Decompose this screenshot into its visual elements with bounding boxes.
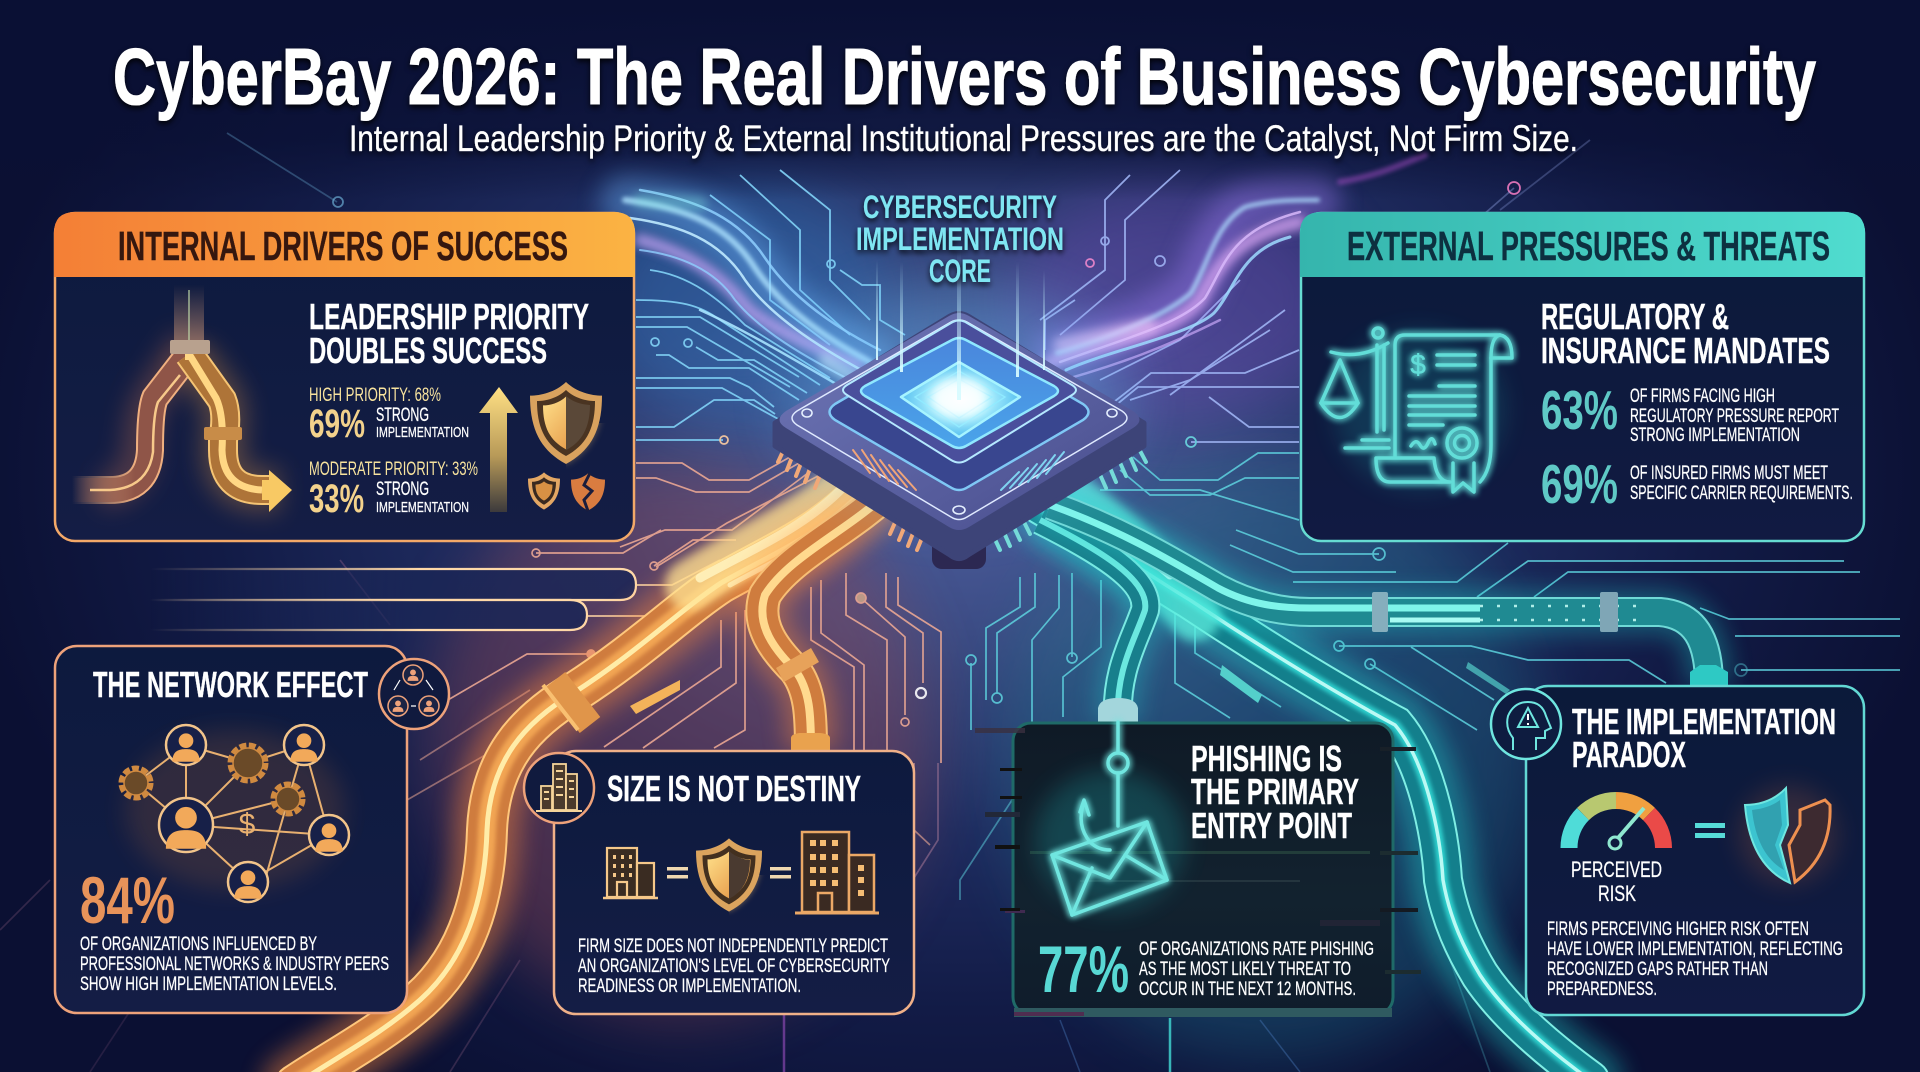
chip screen <box>861 338 1058 448</box>
heading: PHISHING IS <box>1191 738 1342 779</box>
panel header <box>54 212 635 277</box>
stat: high priority: IMPLEMENTATION <box>376 424 469 441</box>
heading: DOUBLES SUCCESS <box>309 330 547 371</box>
heading: THE PRIMARY <box>1191 771 1359 812</box>
panel: internal drivers of success <box>54 212 635 541</box>
stat: moderate priority <box>309 458 478 521</box>
gauge label: PERCEIVED <box>1571 857 1662 882</box>
description <box>578 936 890 997</box>
heading <box>309 296 589 371</box>
header text: INTERNAL DRIVERS OF SUCCESS <box>118 223 568 269</box>
lower verticals <box>784 1015 1300 1072</box>
description: OF ORGANIZATIONS RATE PHISHING <box>1139 939 1374 960</box>
stat: 63%: 63% <box>1541 379 1618 441</box>
core label: CORE <box>929 253 991 289</box>
chip top plate <box>780 313 1140 530</box>
equals sign <box>1695 823 1725 838</box>
description <box>1139 939 1374 1000</box>
description: AN ORGANIZATION'S LEVEL OF CYBERSECURITY <box>578 956 890 977</box>
heading: THE NETWORK EFFECT <box>93 664 368 705</box>
icon: risk gauge <box>1569 800 1664 849</box>
panel: external pressures and threats <box>1300 212 1865 541</box>
cyan dashes <box>1220 662 1510 703</box>
circuit traces: upper right <box>1040 140 1590 447</box>
description: AS THE MOST LIKELY THREAT TO <box>1139 959 1351 980</box>
icon: small building <box>603 848 658 898</box>
description: RECOGNIZED GAPS RATHER THAN <box>1547 959 1768 980</box>
chip base side <box>775 314 1144 558</box>
chip corner rings <box>802 409 1117 514</box>
heading: LEADERSHIP PRIORITY <box>309 296 589 337</box>
circuit traces: lower right teal <box>960 453 1900 1072</box>
panel body <box>55 646 407 1013</box>
stat: 84%: 84% <box>80 863 175 937</box>
gauge label <box>1571 857 1662 906</box>
chip <box>775 250 1146 569</box>
description: FIRM SIZE DOES NOT INDEPENDENTLY PREDICT <box>578 936 888 957</box>
heading: SIZE IS NOT DESTINY <box>607 768 861 809</box>
chip core glare <box>931 378 987 418</box>
chip core lines <box>915 371 1005 427</box>
chip stub <box>932 535 986 569</box>
panel body <box>1013 723 1393 1015</box>
chip edge highlight <box>792 320 1127 520</box>
heading <box>1572 701 1836 775</box>
heading: ENTRY POINT <box>1191 805 1352 846</box>
description: SHOW HIGH IMPLEMENTATION LEVELS. <box>80 974 337 995</box>
stat: high priority <box>309 384 469 446</box>
description: PREPAREDNESS. <box>1547 979 1657 1000</box>
stat: 69%: 69% <box>1541 453 1618 515</box>
icon: scales and insurance document <box>1321 328 1512 492</box>
stat: moderate priority: 33% <box>309 477 364 521</box>
icon: large building <box>795 832 879 913</box>
glitch streaks <box>975 728 1421 1017</box>
description: PROFESSIONAL NETWORKS & INDUSTRY PEERS <box>80 954 389 975</box>
chip inner fans <box>853 450 1064 490</box>
chip recess lip <box>830 334 1088 490</box>
circuit traces: upper left <box>227 133 905 444</box>
panel body <box>55 213 634 541</box>
icon glow <box>1335 330 1505 490</box>
icon: broken shield <box>571 473 605 511</box>
heading <box>1191 738 1359 846</box>
chip pins <box>778 447 1146 550</box>
chip recess ring <box>843 320 1076 462</box>
panel: phishing <box>975 722 1421 1017</box>
network diagram: $ <box>239 808 256 841</box>
panel: the network effect <box>55 646 449 1013</box>
icon badge: buildings <box>524 753 594 823</box>
icon badge: head with warning <box>1491 689 1561 759</box>
icon: hook and envelope <box>1052 722 1167 915</box>
chip glow <box>789 290 1129 510</box>
light swooshes: upper right <box>1045 155 1425 385</box>
panel body <box>1301 213 1864 541</box>
icon: large shield <box>530 382 602 464</box>
icon glow <box>1035 770 1185 910</box>
icon: cracked shield <box>1738 785 1838 885</box>
heading: PARADOX <box>1572 734 1686 775</box>
description: OF ORGANIZATIONS INFLUENCED BY <box>80 934 317 955</box>
network diagram <box>121 725 349 902</box>
circuit traces: lower left orange <box>0 457 941 1072</box>
subtitle: Internal Leadership Priority & External Institutional Pressures are the Catalyst, Not Firm Size. <box>349 118 1578 159</box>
panel header <box>1300 212 1865 277</box>
pipe: cyan branch to paradox <box>1050 505 1728 685</box>
stat: moderate priority: MODERATE PRIORITY: 33% <box>309 458 478 480</box>
stat: moderate priority: STRONG <box>376 479 429 500</box>
light swooshes: upper left <box>625 190 880 395</box>
stat: moderate priority: IMPLEMENTATION <box>376 499 469 516</box>
icon: small shield <box>528 472 560 510</box>
stat: high priority: STRONG <box>376 405 429 426</box>
description <box>1547 919 1843 1000</box>
core label: IMPLEMENTATION <box>856 221 1064 257</box>
panel: size is not destiny <box>524 751 914 1014</box>
gauge label: RISK <box>1598 881 1636 906</box>
panel: implementation paradox <box>1491 686 1864 1015</box>
icon: splitting pipe <box>72 285 292 512</box>
orange dashes <box>630 680 680 714</box>
stat: 77%: 77% <box>1038 932 1129 1006</box>
icon: up arrow <box>479 387 518 512</box>
stat: high priority: 69% <box>309 402 365 446</box>
stat: 63% <box>1541 379 1839 446</box>
stat: 63%: STRONG IMPLEMENTATION <box>1630 425 1800 446</box>
pipe: orange branch to size panel <box>762 490 890 750</box>
stat: high priority: HIGH PRIORITY: 68% <box>309 384 441 406</box>
equals sign <box>667 867 688 878</box>
core label <box>856 189 1064 289</box>
icon badge: peers <box>379 659 449 729</box>
description: FIRMS PERCEIVING HIGHER RISK OFTEN <box>1547 919 1809 940</box>
description <box>80 934 389 995</box>
stat: 63%: OF FIRMS FACING HIGH <box>1630 386 1775 407</box>
heading: REGULATORY & <box>1541 296 1729 337</box>
icon: shield <box>696 838 762 912</box>
description: READINESS OR IMPLEMENTATION. <box>578 976 801 997</box>
stat: 69% <box>1541 453 1853 515</box>
panel body <box>554 751 914 1014</box>
icon: scales and insurance document: $ <box>1410 349 1426 380</box>
chip light beams <box>876 250 1045 400</box>
equals sign <box>770 867 791 878</box>
stat: 69%: OF INSURED FIRMS MUST MEET <box>1630 463 1828 484</box>
capsule circuit loops <box>150 569 636 630</box>
heading <box>1541 296 1830 371</box>
panel body <box>1526 686 1864 1015</box>
description: OCCUR IN THE NEXT 12 MONTHS. <box>1139 979 1356 1000</box>
pipe: cyan branch to phishing <box>1040 520 1145 725</box>
core label: CYBERSECURITY <box>863 189 1057 225</box>
chip core <box>901 362 1020 437</box>
pipe: cyan main <box>1020 478 1590 1072</box>
pipe: orange main to network effect <box>295 472 875 1072</box>
